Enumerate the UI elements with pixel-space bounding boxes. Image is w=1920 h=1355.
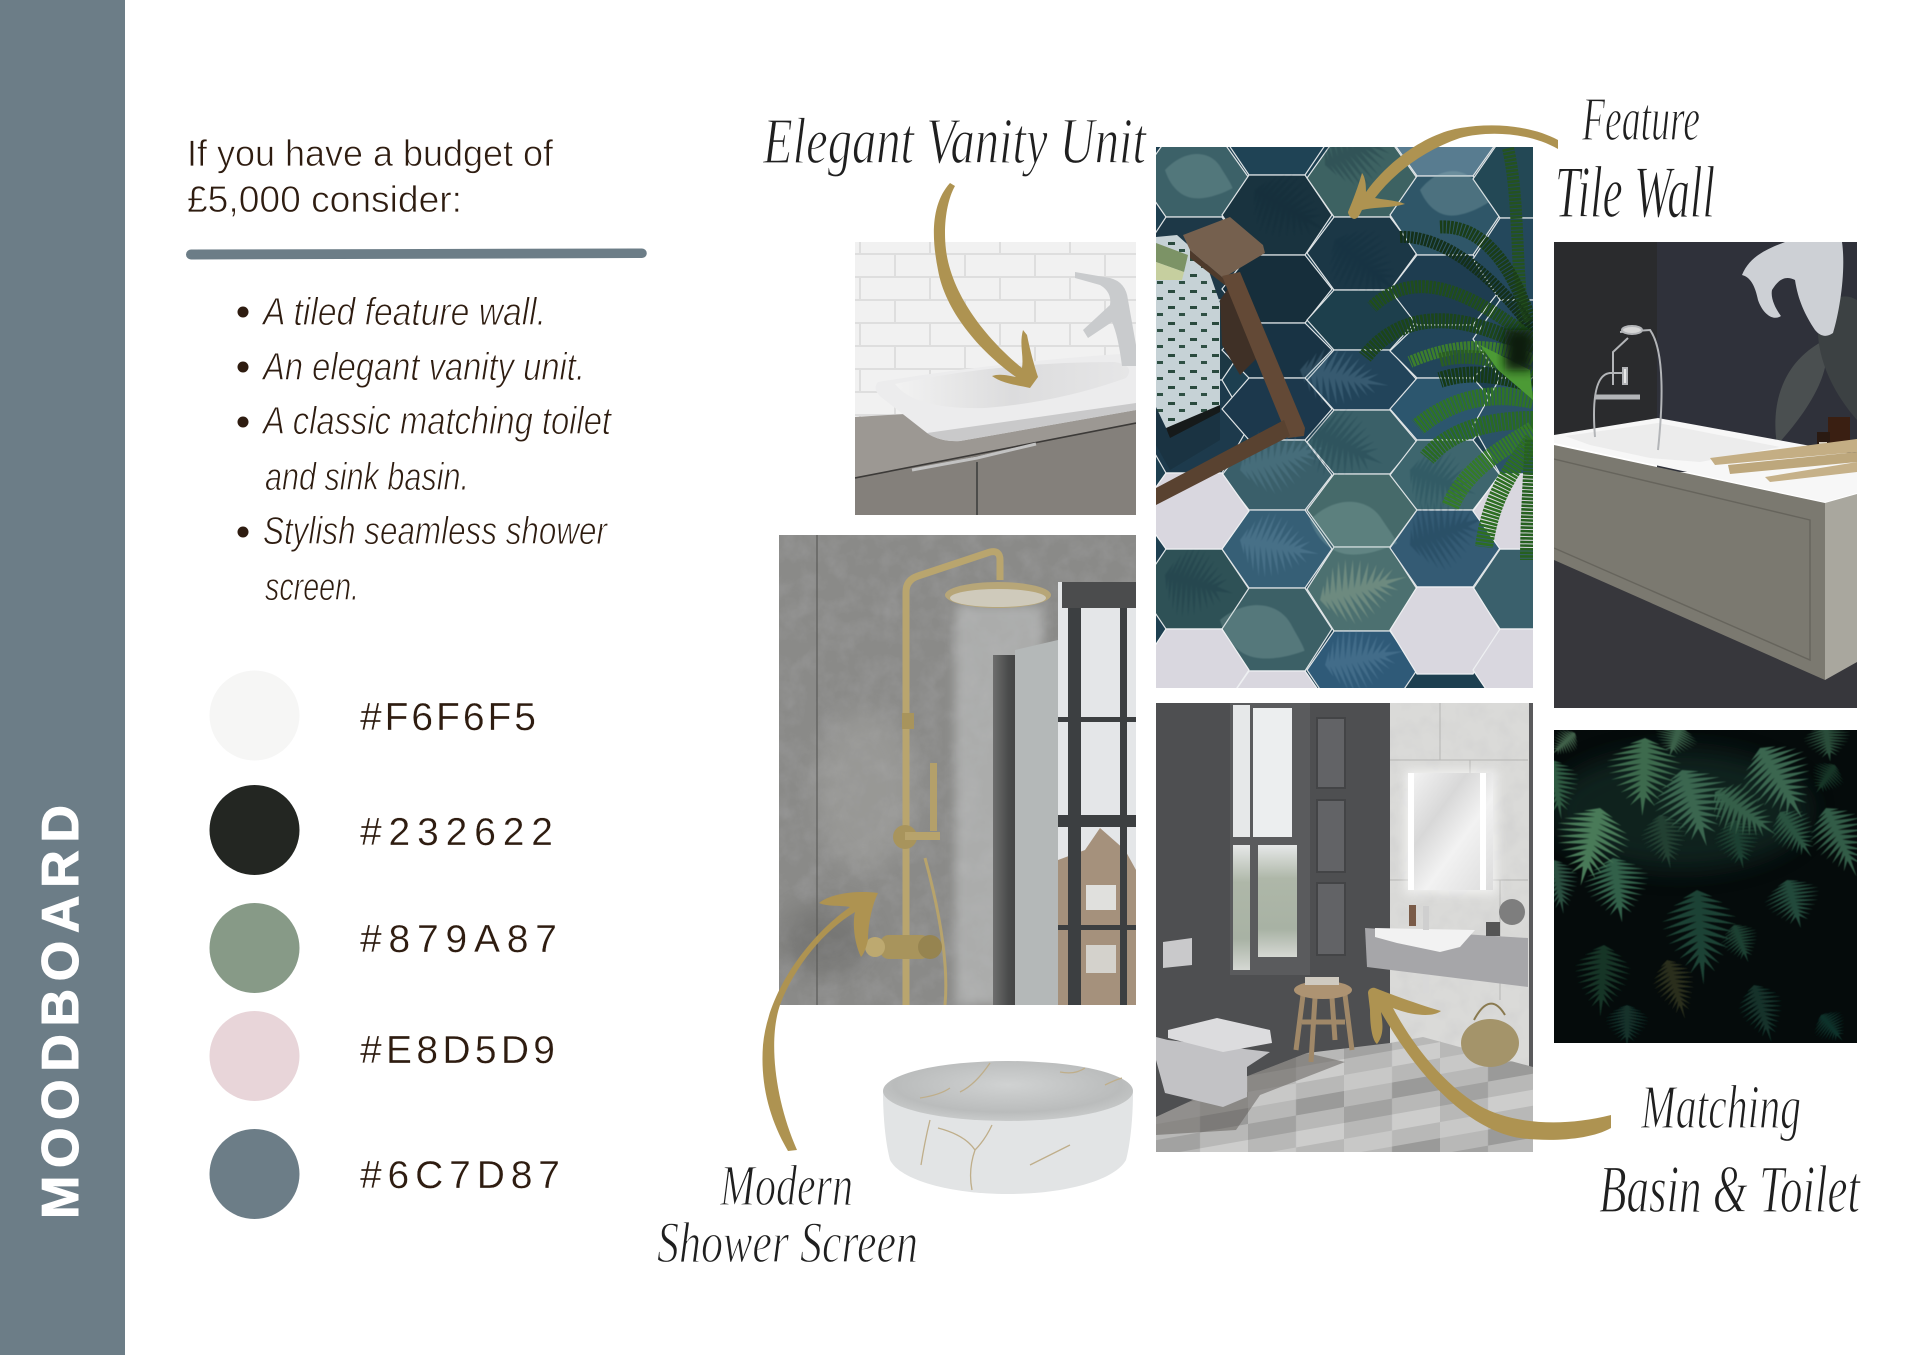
window <box>1230 703 1310 975</box>
sidebar title: MOODBOARD <box>32 805 90 1219</box>
heading: If you have a budget of <box>187 133 554 174</box>
swatch 879A87: #879A87 <box>360 918 557 961</box>
shutter panels <box>1317 718 1345 955</box>
heading <box>187 133 554 220</box>
lit mirror <box>1405 770 1497 894</box>
towel <box>1156 235 1220 470</box>
tile leaf print <box>1165 147 1488 688</box>
shower fitting <box>865 552 1051 1005</box>
arrow: to tile wall <box>1348 125 1558 219</box>
wicker basket <box>1461 1004 1519 1067</box>
swatch 232622 <box>210 785 553 875</box>
photo: dark jungle <box>1554 730 1857 1043</box>
swatch E8D5D9 <box>210 1011 555 1101</box>
wooden stool <box>1156 217 1305 505</box>
falling water <box>955 605 1058 1005</box>
tap <box>1075 272 1136 366</box>
floor <box>1156 1037 1533 1152</box>
tray and bottles <box>1710 417 1857 482</box>
divider bar <box>186 248 647 260</box>
window <box>1058 582 1136 1005</box>
bath tub <box>1554 418 1857 472</box>
swatch F6F6F5: #F6F6F5 <box>360 696 536 739</box>
flower and leaves <box>1742 242 1857 445</box>
sidebar <box>0 0 125 1355</box>
photo: brass rain shower <box>779 535 1136 1005</box>
arrow: to shower <box>762 892 878 1151</box>
label: modern shower screen: Modern <box>719 1153 853 1218</box>
toilet <box>1156 1018 1272 1107</box>
photo: vanity basin <box>855 242 1136 515</box>
swatch 879A87 <box>210 903 557 993</box>
bath taps <box>1594 326 1662 450</box>
photo: marble vessel basin <box>883 1061 1133 1194</box>
swatch E8D5D9: #E8D5D9 <box>360 1029 555 1072</box>
label: feature tile wall: Feature <box>1581 86 1700 154</box>
swatch 6C7D87 <box>210 1129 560 1219</box>
marble wall <box>1390 703 1533 1073</box>
bullet list: A classic matching toilet <box>261 400 613 443</box>
bullet list <box>238 291 613 609</box>
label: feature tile wall: Tile Wall <box>1555 152 1715 234</box>
bullet list: screen. <box>265 566 359 609</box>
label: modern shower screen <box>657 1153 918 1275</box>
heading: £5,000 consider: <box>187 179 462 220</box>
colour palette <box>210 670 560 1219</box>
label: modern shower screen: Shower Screen <box>657 1210 918 1275</box>
vanity counter and basin <box>1365 899 1528 993</box>
pale plain tiles <box>1156 472 1533 688</box>
flush plate <box>1163 938 1192 968</box>
bullet list: and sink basin. <box>265 456 469 499</box>
arrow: to basin and toilet <box>1368 988 1611 1140</box>
bullet list: An elegant vanity unit. <box>261 346 585 389</box>
stool <box>1294 977 1352 1062</box>
bullet list: A tiled feature wall. <box>261 291 546 334</box>
floor <box>1554 555 1857 708</box>
swatch F6F6F5 <box>210 670 536 760</box>
hexagon tiles <box>1156 147 1533 688</box>
label: matching basin and toilet <box>1599 1074 1861 1227</box>
arrow: to vanity unit <box>934 183 1038 388</box>
fern <box>1365 148 1533 560</box>
photo: hexagon tile wall with fern <box>1156 147 1533 688</box>
swatch 6C7D87: #6C7D87 <box>360 1154 560 1197</box>
photo: bath panel <box>1554 242 1857 708</box>
photo: bathroom with basin and toilet <box>1156 703 1533 1152</box>
label: elegant vanity unit: Elegant Vanity Unit <box>762 105 1147 178</box>
swatch 232622: #232622 <box>360 811 553 854</box>
label: feature tile wall <box>1555 86 1715 234</box>
bullet list: Stylish seamless shower <box>263 510 609 553</box>
label: matching basin and toilet: Matching <box>1640 1074 1801 1142</box>
